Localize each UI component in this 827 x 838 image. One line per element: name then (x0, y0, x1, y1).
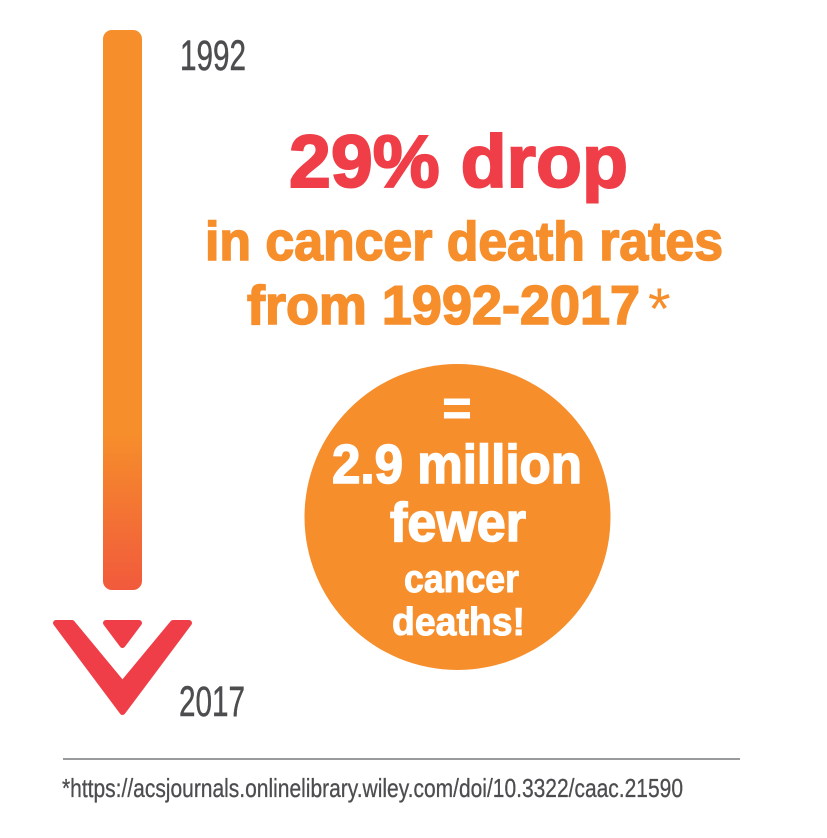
callout: 2.9 million: 2.9 million (332, 433, 582, 495)
subheading line 1: in cancer death rates (205, 210, 723, 272)
circle callout (304, 364, 610, 670)
source citation: *https://acsjournals.onlinelibrary.wiley.com/doi/10.3322/caac.21590 (62, 773, 683, 803)
label: 2017: 2017 (179, 678, 245, 726)
equals sign: = (442, 380, 472, 436)
label: 1992: 1992 (180, 32, 246, 80)
icon: down arrow chevron (56, 623, 189, 712)
callout: deaths!: deaths! (392, 601, 525, 644)
callout: fewer: fewer (390, 491, 526, 553)
timeline bar (103, 30, 142, 590)
footnote asterisk: * (648, 277, 671, 342)
subheading line 2: from 1992-2017 (247, 274, 640, 336)
callout: cancer: cancer (404, 558, 519, 601)
heading: 29% drop: 29% drop (289, 120, 628, 203)
